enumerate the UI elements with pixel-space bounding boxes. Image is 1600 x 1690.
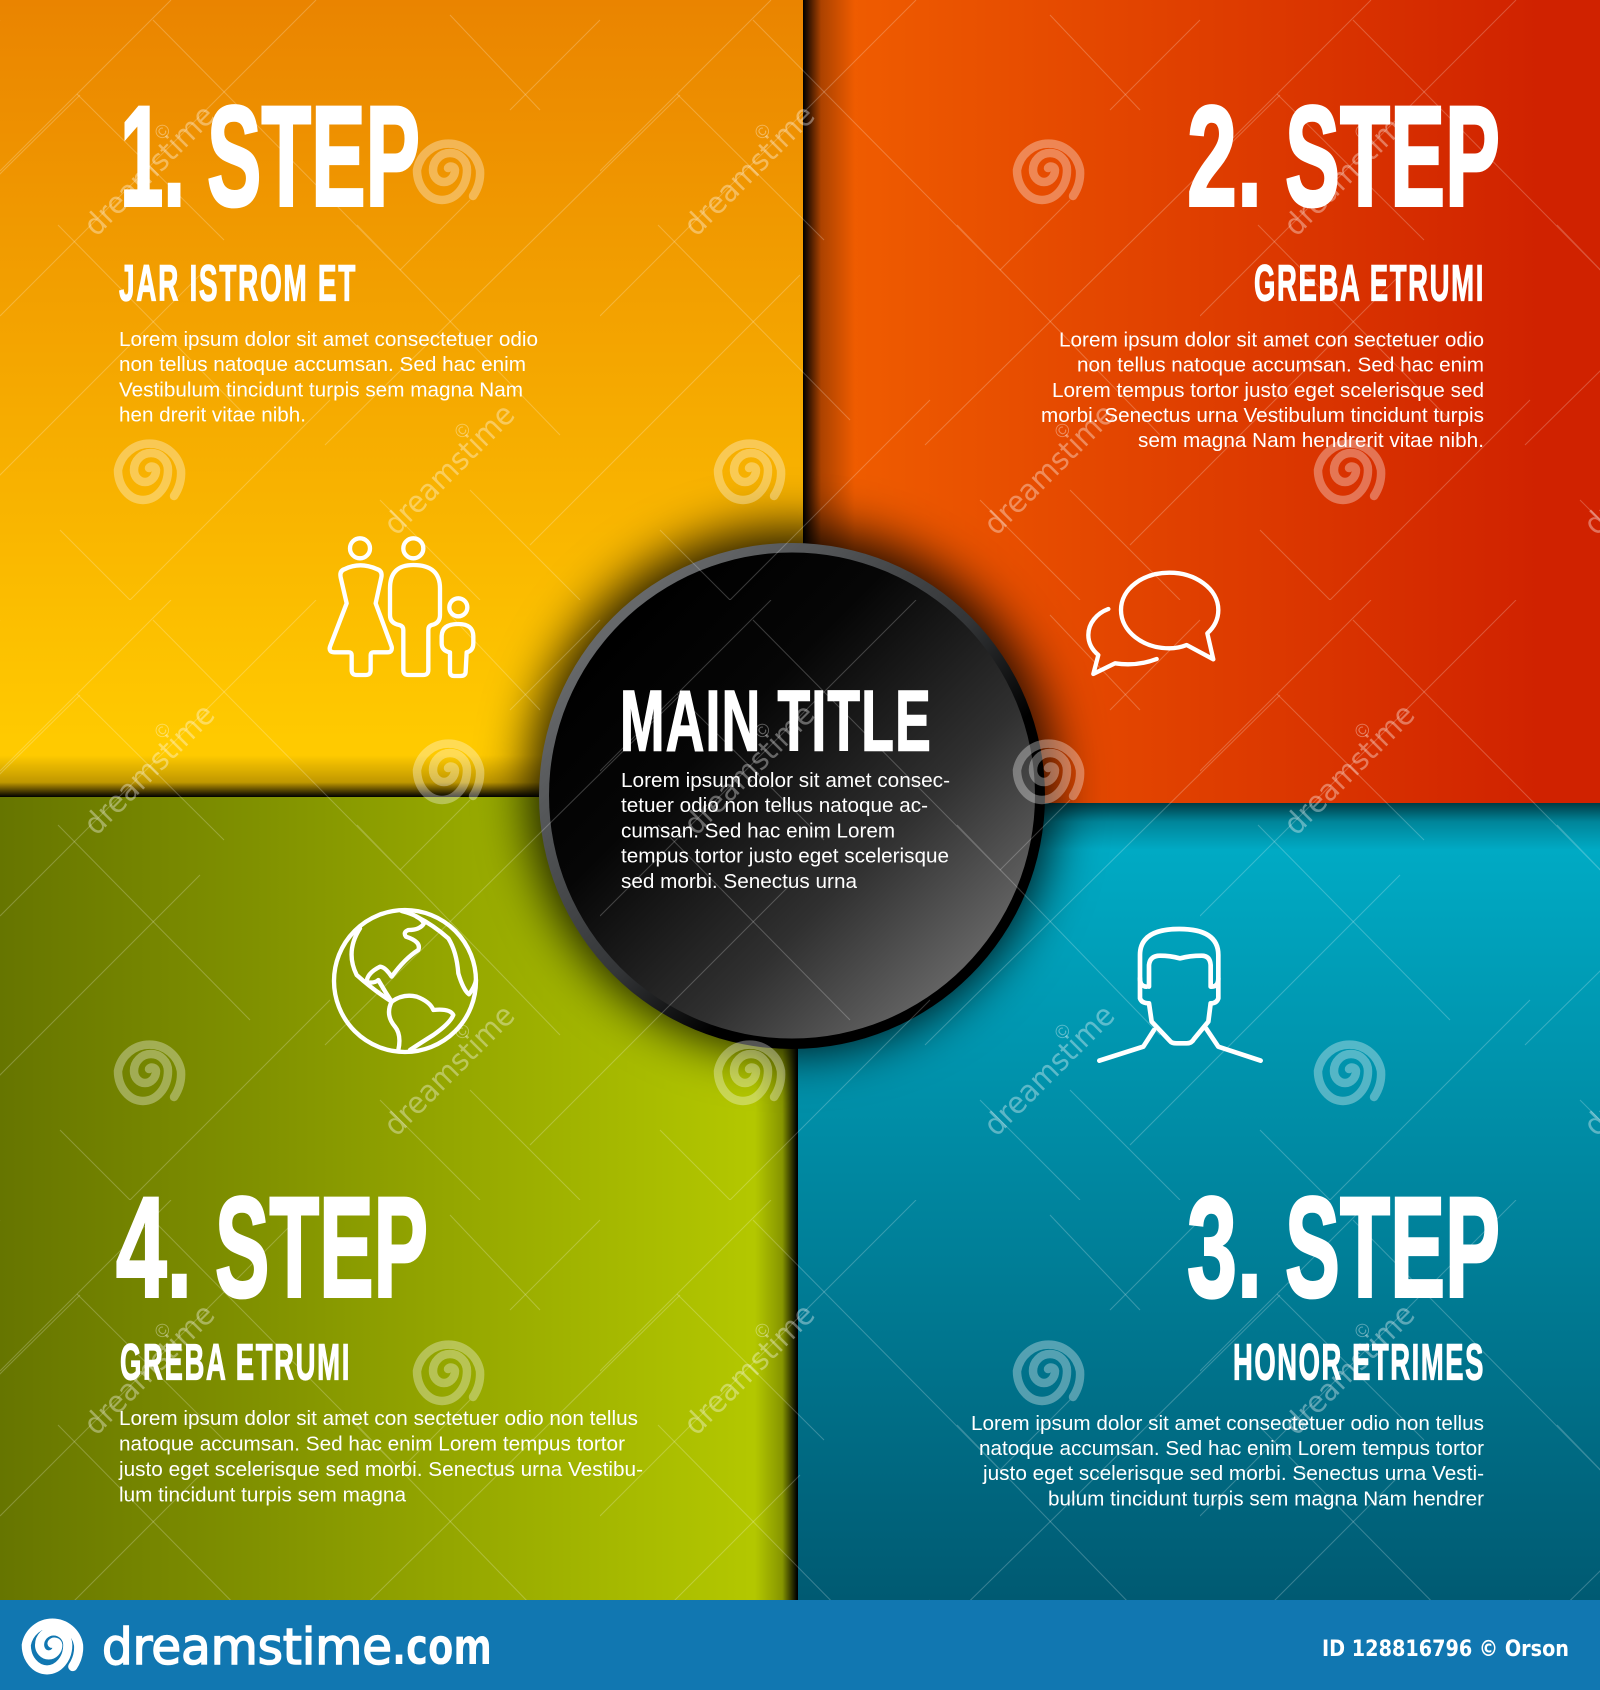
watermark overlay: dreamstime (377, 397, 522, 542)
watermark overlay: © (451, 419, 475, 443)
watermark overlay: dreamstime (977, 397, 1122, 542)
text block: step 1: non tellus natoque accumsan. Sed hac enim (119, 353, 526, 376)
panel 3: teal step (798, 803, 1600, 1600)
text block: step 4: Lorem ipsum dolor sit amet con sectetuer odio non tellus (119, 1407, 638, 1430)
text block: step 2: Lorem tempus tortor justo eget scelerisque sed (1052, 379, 1484, 402)
text block: step 4 (118, 1407, 643, 1506)
text block: center: cumsan. Sed hac enim Lorem (621, 820, 895, 842)
watermark overlay: dreamstime (77, 1297, 222, 1442)
watermark overlay: dreamstime (77, 697, 222, 842)
main title: MAIN TITLE (620, 674, 932, 770)
text block: step 3: Lorem ipsum dolor sit amet consectetuer odio non tellus (971, 1412, 1484, 1435)
icon: globe (334, 910, 476, 1052)
panel 4: green step (0, 797, 798, 1600)
subheading: GREBA ETRUMI: GREBA ETRUMI (120, 1334, 351, 1390)
text block: step 1: hen drerit vitae nibh. (119, 404, 306, 426)
panel 1: orange step (0, 0, 803, 797)
watermark overlay: dreamstime (77, 98, 222, 243)
text block: step 2: sem magna Nam hendrerit vitae nibh. (1138, 429, 1484, 452)
text block: step 3 (971, 1412, 1484, 1510)
text block: step 2: Lorem ipsum dolor sit amet con sectetuer odio (1059, 328, 1484, 352)
text block: step 4: natoque accumsan. Sed hac enim Lorem tempus tortor (119, 1432, 625, 1456)
heading: 4. STEP: 4. (116, 1168, 192, 1328)
center circle with main title (530, 528, 1054, 1052)
watermark overlay: © (151, 1319, 175, 1343)
watermark overlay: dreamstime (677, 98, 822, 243)
text block: center: Lorem ipsum dolor sit amet consec- (621, 769, 950, 792)
text block: step 4: justo eget scelerisque sed morbi. Senectus urna Vestibu- (118, 1458, 643, 1481)
watermark overlay: © (151, 719, 175, 743)
heading: 3. STEP: 3. (1187, 1168, 1262, 1328)
watermark overlay: © (451, 1020, 475, 1044)
text block: step 3: natoque accumsan. Sed hac enim Lorem tempus tortor (979, 1437, 1484, 1460)
watermark overlay: © (1351, 1319, 1375, 1343)
watermark overlay: © (1051, 419, 1075, 443)
image id credit: ID 128816796 © Orson (1322, 1637, 1569, 1662)
watermark overlay: © (151, 120, 175, 144)
heading: 4. STEP: STEP (215, 1168, 428, 1328)
watermark overlay: dreamstime (677, 1297, 822, 1442)
heading: 1. STEP: 1. (120, 78, 185, 236)
text block: step 1 (119, 328, 538, 426)
watermark overlay: dreamstime (977, 998, 1122, 1143)
watermark overlay: © (751, 120, 775, 144)
text block: step 2: non tellus natoque accumsan. Sed hac enim (1077, 354, 1484, 376)
text block: center: tempus tortor justo eget scelerisque (621, 844, 949, 868)
icon: logo spiral (26, 1623, 79, 1670)
text block: step 1: Vestibulum tincidunt turpis sem magna Nam (119, 378, 523, 402)
text block: step 3: bulum tincidunt turpis sem magna Nam hendrer (1048, 1488, 1484, 1510)
text block: step 4: lum tincidunt turpis sem magna (119, 1484, 407, 1506)
text block: step 1: Lorem ipsum dolor sit amet consectetuer odio (119, 328, 538, 351)
footer bar (0, 1600, 1600, 1690)
watermark overlay: dreamstime (1277, 697, 1422, 842)
subheading: JAR ISTROM ET: JAR ISTROM ET (119, 254, 357, 312)
watermark overlay: dreamstime (1277, 1297, 1422, 1442)
text block: center: sed morbi. Senectus urna (621, 870, 858, 893)
logo text: dreamstime (102, 1618, 392, 1676)
icon: male head (1099, 929, 1261, 1061)
text block: step 2: morbi. Senectus urna Vestibulum tincidunt turpis (1041, 404, 1484, 427)
icon: speech bubbles (1088, 573, 1218, 674)
watermark overlay: © (751, 1319, 775, 1343)
logo text: .com (392, 1618, 492, 1676)
heading: 1. STEP: STEP (207, 78, 420, 236)
panel 2: red step (803, 0, 1600, 803)
text block: step 3: justo eget scelerisque sed morbi. Senectus urna Vesti- (982, 1462, 1484, 1485)
text block: center: tetuer odio non tellus natoque ac- (621, 794, 928, 817)
watermark overlay: © (1351, 120, 1375, 144)
text block: step 2 (1041, 328, 1484, 452)
watermark overlay: © (1351, 719, 1375, 743)
watermark overlay: © (751, 719, 775, 743)
watermark overlay: dreamstime (377, 998, 522, 1143)
text block: center (621, 769, 950, 893)
watermark overlay: © (1051, 1020, 1075, 1044)
watermark overlay: dreamstime (677, 697, 822, 842)
icon: family (330, 538, 473, 676)
watermark overlay: dreamstime (1277, 98, 1422, 243)
heading: 2. STEP: 2. (1187, 78, 1262, 236)
